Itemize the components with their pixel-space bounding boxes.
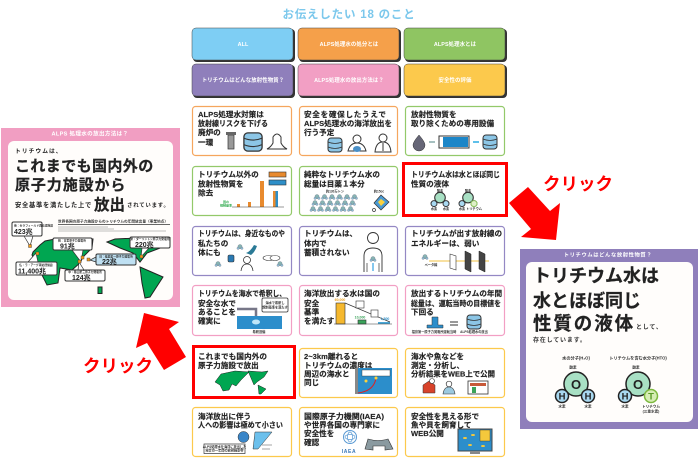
button: ALPS処理水の処分とは: ALPS処理水の処分とは <box>320 40 379 48</box>
card: 安全基準: 安全 <box>304 298 320 308</box>
card: 年間総量 <box>406 286 504 336</box>
callout: 423兆: 英：セラフィールド再処理施設 <box>14 224 53 228</box>
callout: 220兆: 220兆 <box>135 240 154 249</box>
panel: right popup <box>520 249 698 429</box>
diagram: tritiated water molecule HTO: O <box>633 377 643 392</box>
panel heading <box>533 266 663 344</box>
callout: 22兆: 日：福島第一原子力発電所 <box>99 254 133 258</box>
card: 身近なもの <box>192 226 292 276</box>
card: 水とほぼ同じ性質の液体 (highlighted): 酸素 <box>465 188 472 193</box>
card: 人への影響 <box>192 408 292 456</box>
diagram: water molecule H2O <box>556 354 594 408</box>
arrow: to right popup <box>509 187 560 240</box>
card: 廃炉の一環: 廃炉の <box>198 127 221 137</box>
diagram: water molecule H2O: H <box>559 392 566 402</box>
card: 年間総量: 総量は、運転当時の目標値を <box>411 298 501 308</box>
label: click left: クリック <box>83 356 153 376</box>
card: 安全基準: を満たす <box>304 316 335 326</box>
card: 蓄積されない: 体内で <box>304 238 327 248</box>
button: ALPS処理水とは: ALPS処理水とは <box>434 40 477 48</box>
card: 蓄積されない: トリチウムは、 <box>304 229 357 238</box>
card: 海水で希釈: 海水で希釈し <box>265 300 285 305</box>
card: IAEA: や世界各国の専門家に <box>304 420 380 430</box>
callout: 11,400兆: 11,400兆 <box>18 266 46 276</box>
button: ALPS処理水の放出方法は？: ALPS処理水の放出方法は？ <box>314 76 384 84</box>
card: 除去: 国の <box>223 199 229 204</box>
card: 蓄積されない: 蓄積されない <box>304 247 350 257</box>
card: 蓄積されない <box>300 226 398 276</box>
panel heading: 安全基準を満たした上で <box>15 200 92 209</box>
card: 水とほぼ同じ性質の液体 (highlighted): 酸素 <box>437 188 444 193</box>
card: 国内外の原子力施設で放出 (highlighted) <box>194 346 294 398</box>
card: IAEA: 国際原子力機関(IAEA) <box>304 411 384 421</box>
card: 総量: 約130万トン <box>326 188 344 194</box>
arrow: to left popup <box>136 313 186 370</box>
diagram: tritiated water molecule HTO: T <box>648 392 654 402</box>
card grid <box>192 106 506 456</box>
card: 測定・分析: 海水や魚などを <box>411 351 464 361</box>
callout: 91兆: 韓：古里原子力発電所 <box>58 238 86 242</box>
callout: 91兆: 91兆 <box>60 242 75 250</box>
card: 魚や貝を飼育: WEB公開 <box>411 429 444 438</box>
callout: 124兆 <box>65 260 105 282</box>
panel heading: として、 <box>636 324 663 331</box>
map title: 世界各国の原子力施設からのトリチウムの年間放出量（事業地点） <box>58 218 168 224</box>
card: 廃炉の一環: 一環 <box>198 138 214 147</box>
panel header: ALPS 処理水の放出方法は？ <box>52 130 128 138</box>
button: 安全性の評価: 安全性の評価 <box>439 76 472 84</box>
card: 海洋放出: ALPS処理水の海洋放出を <box>304 118 392 128</box>
diagram: water molecule H2O: O <box>571 377 581 392</box>
card: 魚や貝を飼育: 安全性を見える形で <box>411 411 480 421</box>
panel heading: されています。 <box>127 202 170 209</box>
card: 総量 <box>300 166 398 216</box>
panel heading: 原子力施設から <box>15 176 126 194</box>
card: 海水で希釈: トリチウムを海水で希釈し、 <box>198 288 286 298</box>
card: 魚や貝を飼育 <box>406 408 504 456</box>
card: エネルギー: トリチウムが出す放射線の <box>411 228 503 238</box>
card: 人への影響: 海洋放出に伴う <box>198 411 251 421</box>
card: 除去: トリチウム以外の <box>198 169 259 179</box>
diagram: tritiated water molecule HTO: トリチウム <box>642 404 660 408</box>
card: 水とほぼ同じ性質の液体 (highlighted) <box>404 164 506 216</box>
card: 安全基準 <box>300 286 398 336</box>
button: ALPS処理水とは <box>404 28 507 62</box>
callout: 22兆: 22兆 <box>102 257 117 266</box>
card: 水とほぼ同じ性質の液体 (highlighted): トリチウム <box>466 206 483 211</box>
card: 海水で希釈 <box>192 286 292 336</box>
card: 2〜3km <box>300 348 398 398</box>
card: 海水で希釈: 希釈設備 <box>253 329 266 334</box>
card: 廃炉の一環 <box>192 106 292 156</box>
card: 海水で希釈: あることを <box>198 308 236 316</box>
diagram: tritiated water molecule HTO: (三重水素) <box>643 408 660 414</box>
card: 除去: 除去 <box>198 188 214 198</box>
card: 国内外の原子力施設で放出 (highlighted): これまでも国内外の <box>198 351 267 361</box>
card: 海洋放出 <box>300 106 398 156</box>
card: 専用設備: 取り除くための専用設備 <box>411 118 494 128</box>
card: 除去: 放射性物質を <box>198 178 244 188</box>
map title <box>58 218 170 231</box>
button: ALL <box>192 28 295 62</box>
diagram: tritiated water molecule HTO: トリチウムを含む水分子(HTO) <box>609 354 667 362</box>
callout: 91兆 <box>53 238 92 262</box>
callout: 11,400兆: 仏：ラ・アーグ再処理施設 <box>19 263 53 267</box>
button: ALPS処理水の放出方法は？ <box>298 64 401 98</box>
panel heading: トリチウム水は <box>533 266 659 286</box>
map callouts <box>12 222 170 282</box>
card: 海洋放出: 行う予定 <box>304 127 335 137</box>
card: 除去 <box>192 166 292 216</box>
card: エネルギー <box>406 226 504 276</box>
card: 身近なもの: トリチウムは、身近なものや <box>198 228 285 238</box>
card: 水とほぼ同じ性質の液体 (highlighted): 水素 <box>443 206 450 211</box>
card: 海水で希釈: 確実に <box>198 316 221 326</box>
card: 年間総量: 下回る <box>411 308 434 316</box>
card: エネルギー: エネルギーは、弱い <box>411 238 480 248</box>
card: 魚や貝を飼育: 魚や貝を飼育して <box>411 420 472 430</box>
card: 安全基準: 1,500 <box>381 317 389 321</box>
callout: 220兆 <box>130 237 170 258</box>
panel heading: トリチウムは、 <box>15 147 63 155</box>
callout: 22兆 <box>87 254 136 266</box>
card: 総量: 総量は目薬１本分 <box>304 178 365 188</box>
diagram: tritiated water molecule HTO <box>609 354 667 414</box>
button: トリチウムはどんな放射性物質？ <box>192 64 295 98</box>
card: 海洋放出: 安全を確保したうえで <box>304 109 386 119</box>
card: 安全基準: 基準 <box>304 306 320 316</box>
card: 総量: 約15cc <box>374 188 384 194</box>
panel: left popup <box>1 128 180 307</box>
card: 海水で希釈: 安全な水で <box>198 298 236 308</box>
card: IAEA <box>300 408 398 456</box>
callout: 124兆: 124兆 <box>72 273 91 282</box>
diagram: water molecule H2O: 酸素 <box>569 364 577 370</box>
card: 除去: 規制基準 <box>220 202 232 208</box>
panel heading: 存在しています。 <box>533 336 587 344</box>
diagram: tritiated water molecule HTO: 水素 <box>621 404 629 408</box>
card: エネルギー: ベータ線 <box>425 262 438 267</box>
card: 廃炉の一環: 放射線リスクを下げる <box>198 118 268 128</box>
card: 人への影響: 人への影響は極めて小さい <box>198 420 283 430</box>
card: IAEA: IAEA <box>342 449 356 455</box>
card: 廃炉の一環: ALPS処理水対策は <box>198 109 264 119</box>
callout: 11,400兆 <box>16 252 57 276</box>
card: 水とほぼ同じ性質の液体 (highlighted): 水素 <box>459 206 466 211</box>
callout: 423兆 <box>12 222 53 248</box>
card: 専用設備 <box>406 106 504 156</box>
world map <box>32 237 170 298</box>
card: 国内外の原子力施設で放出 (highlighted): 原子力施設で放出 <box>198 360 259 370</box>
button: 安全性の評価 <box>404 64 507 98</box>
callout: 220兆: 米：ダーリントン原子力発電所 <box>130 237 170 241</box>
card: 安全基準: 海洋放出する水は国の <box>304 288 380 298</box>
card: 水とほぼ同じ性質の液体 (highlighted): 性質の液体 <box>411 178 449 188</box>
card: 測定・分析: 測定・分析し、 <box>411 360 464 370</box>
card: 身近なもの: 体にも <box>198 247 221 257</box>
panel heading: これまでも国内外の <box>15 157 154 175</box>
card: 人への影響: ALPS処理水を海洋に放出した <box>203 444 246 449</box>
card: 人への影響: 場合の一年間の放射線影響 <box>205 448 244 452</box>
diagram: water molecule H2O: 水素 <box>584 404 592 408</box>
button: ALL: ALL <box>238 42 249 48</box>
diagram: water molecule H2O: H <box>585 392 592 402</box>
panel heading <box>15 147 170 214</box>
panel header: トリチウムはどんな放射性物質？ <box>564 250 652 258</box>
label: click right: クリック <box>543 174 613 194</box>
card: 海水で希釈: 規制基準を満たす <box>262 304 288 310</box>
card: 総量: 純粋なトリチウム水の <box>304 169 380 179</box>
card: IAEA: 確認 <box>304 437 320 447</box>
card: 身近なもの: 私たちの <box>198 238 229 248</box>
button: ALPS処理水の処分とは <box>298 28 401 62</box>
card: 2〜3km: 周辺の海水と <box>304 368 350 378</box>
panel heading: 性質の液体 <box>533 313 635 334</box>
panel heading: 水とほぼ同じ <box>533 291 641 311</box>
card: 2〜3km: 2~3km離れると <box>304 351 358 361</box>
card: 安全基準: 60,000 <box>335 298 345 302</box>
card: 水とほぼ同じ性質の液体 (highlighted): 水素 <box>431 206 438 211</box>
callout: 124兆: 中：秦山第三原子力発電所 <box>68 270 102 274</box>
diagram: tritiated water molecule HTO: H <box>622 392 629 402</box>
callout: 423兆: 423兆 <box>14 227 33 236</box>
card: 2〜3km: 同じ <box>304 378 319 387</box>
card: 専用設備: 放射性物質を <box>411 109 457 119</box>
card: 測定・分析: 分析結果をWEB上で公開 <box>411 368 495 378</box>
button: トリチウムはどんな放射性物質？: トリチウムはどんな放射性物質？ <box>202 76 284 84</box>
card: 年間総量: 福島第一原子力発電所運転当時 <box>412 329 457 334</box>
title: お伝えしたい 18 のこと <box>282 7 416 21</box>
diagram: water molecule H2O: 水素 <box>558 404 566 408</box>
card: 年間総量: ALPS処理水の放出 <box>460 329 488 334</box>
filter buttons <box>192 28 507 98</box>
diagram: tritiated water molecule HTO: 酸素 <box>632 364 640 370</box>
panel heading: 放出 <box>94 196 125 214</box>
card: 年間総量: 放出するトリチウムの年間 <box>411 288 503 298</box>
card: 測定・分析 <box>406 348 504 398</box>
card: 水とほぼ同じ性質の液体 (highlighted): トリチウム水は水とほぼ同じ <box>411 169 500 179</box>
diagram: water molecule H2O: 水の分子(H₂O) <box>562 354 590 362</box>
card: 安全基準: 10,000 <box>355 316 365 320</box>
card: IAEA: 安全性を <box>304 428 334 438</box>
card: 2〜3km: トリチウムの濃度は <box>304 360 373 370</box>
